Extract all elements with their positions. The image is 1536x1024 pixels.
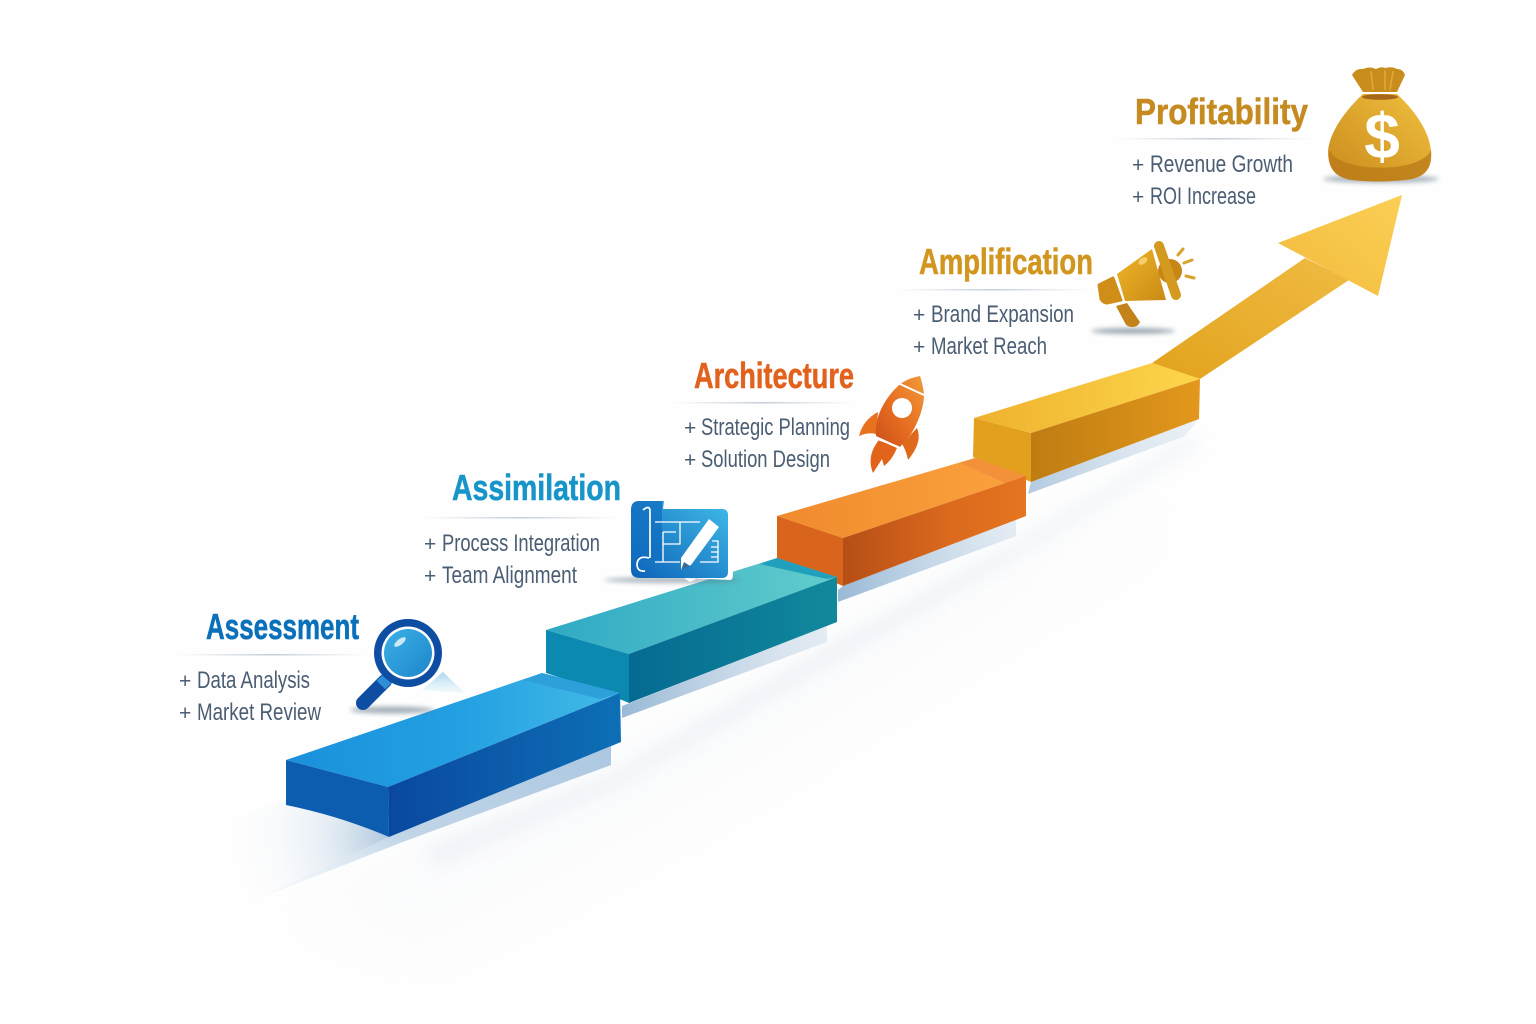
icon beam behind magnifier [422, 672, 465, 693]
label: Assessment: Market Review [197, 699, 322, 726]
label: Profitability: + [1132, 154, 1150, 177]
label: Profitability: ROI Increase [1150, 183, 1256, 210]
label: Profitability: Profitability [1135, 91, 1308, 132]
icon: money bag [1323, 67, 1439, 183]
icon: blueprint [604, 501, 740, 583]
label: Assessment: + [179, 670, 197, 693]
label: Assimilation: Process Integration [442, 530, 600, 557]
label: Assessment: + [179, 702, 197, 725]
label: Profitability [1115, 91, 1315, 210]
label: Architecture: Strategic Planning [701, 414, 850, 441]
label: Amplification: + [913, 336, 931, 359]
step 3: orange block [777, 458, 1026, 586]
label: Assessment [175, 606, 365, 726]
label: Assimilation: Team Alignment [442, 562, 577, 589]
label: Assimilation: + [424, 533, 442, 556]
step 1: blue block [286, 673, 621, 837]
label: Architecture: + [684, 417, 702, 440]
label: Amplification: + [913, 304, 931, 327]
arrow shaft [1152, 258, 1349, 379]
label: Assimilation: Assimilation [452, 467, 621, 508]
arrow [1152, 195, 1402, 379]
step 4: yellow block [973, 363, 1200, 482]
icon: rocket [859, 376, 924, 473]
label: Assessment: Assessment [206, 606, 359, 647]
icon: money bag: $ [1364, 100, 1400, 172]
arrow head [1278, 195, 1402, 296]
label: Assimilation [420, 467, 621, 589]
label: Assessment: Data Analysis [197, 667, 310, 694]
label: Profitability: + [1132, 186, 1150, 209]
label: Profitability: Revenue Growth [1150, 151, 1293, 178]
label: Architecture [670, 355, 855, 473]
label: Assimilation: + [424, 565, 442, 588]
icon: megaphone [1091, 246, 1194, 334]
label: Amplification [895, 241, 1093, 360]
label: Architecture: Architecture [694, 355, 854, 396]
ground shadows [210, 419, 1200, 900]
label: Amplification: Amplification [919, 241, 1093, 282]
background floor glow [300, 510, 1170, 950]
label: Amplification: Market Reach [931, 333, 1047, 360]
label: Architecture: + [684, 449, 702, 472]
icon: magnifying glass [350, 619, 442, 714]
label: Amplification: Brand Expansion [931, 301, 1074, 328]
label: Architecture: Solution Design [701, 446, 830, 473]
step 2: teal block [546, 558, 837, 703]
